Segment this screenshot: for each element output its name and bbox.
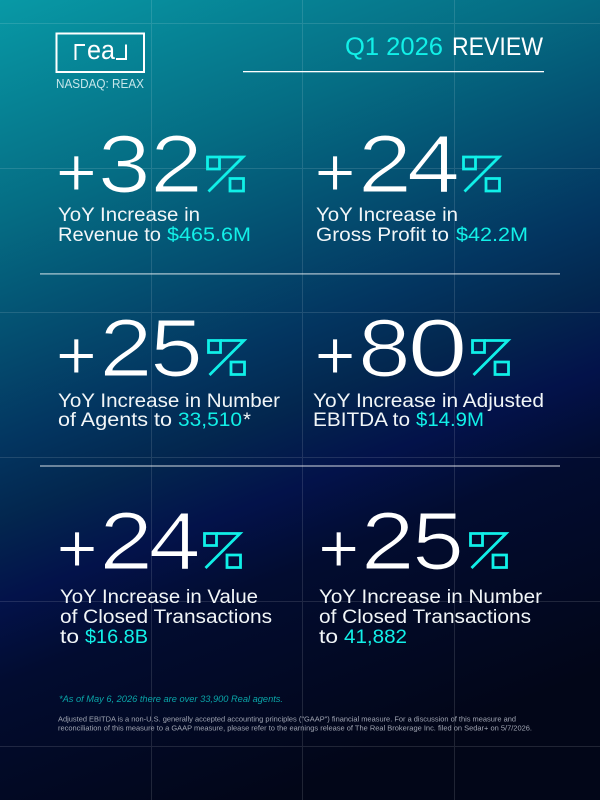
- panel: value of closed transactions: of Closed Transactions: [60, 607, 272, 628]
- panel: gross profit: Gross Profit to: [316, 225, 449, 246]
- panel: agents: [56, 303, 281, 431]
- panel: number of closed transactions: of Closed Transactions: [319, 607, 531, 628]
- footnote: adjusted EBITDA disclaimer: [58, 714, 532, 732]
- panel: revenue: [56, 119, 251, 246]
- footnote: adjusted EBITDA disclaimer: Adjusted EBITDA is a non-U.S. generally accepted accounting principles ("GAAP") financial measure. For a discussion of this measure and: [58, 714, 516, 724]
- icon: percent: [472, 340, 508, 375]
- panel: value of closed transactions: +: [57, 509, 98, 587]
- panel: number of closed transactions: 5: [412, 496, 464, 587]
- panel: number of closed transactions: to: [319, 627, 338, 648]
- panel: value of closed transactions: $16.8B: [85, 627, 148, 648]
- panel: gross profit: [315, 119, 528, 246]
- panel: agents: of Agents to: [58, 410, 172, 431]
- panel: adjusted EBITDA: [313, 303, 544, 431]
- footnote: adjusted EBITDA disclaimer: reconciliation of this measure to a GAAP measure, please refer to the earnings release of The Real Brokerage Inc. filed on Sedar+ on 5/7/2026.: [58, 724, 532, 732]
- panel: gross profit: 4: [407, 119, 460, 210]
- panel: value of closed transactions: 4: [148, 496, 201, 587]
- panel: adjusted EBITDA: +: [315, 316, 356, 394]
- panel: gross profit: YoY Increase in: [316, 205, 458, 226]
- panel: revenue: 2: [150, 119, 203, 210]
- panel: adjusted EBITDA: 0: [408, 303, 468, 394]
- panel: agents: YoY Increase in Number: [58, 391, 281, 412]
- panel: value of closed transactions: [57, 496, 272, 648]
- panel: number of closed transactions: YoY Increase in Number: [319, 587, 543, 608]
- panel: number of closed transactions: 2: [361, 496, 415, 587]
- panel: number of closed transactions: +: [318, 509, 359, 587]
- panel: gross profit: $42.2M: [456, 225, 528, 246]
- panel: value of closed transactions: to: [60, 627, 79, 648]
- icon: percent: [464, 157, 500, 192]
- icon: percent: [208, 340, 244, 375]
- panel: adjusted EBITDA: 8: [358, 303, 411, 394]
- panel: revenue: Revenue to: [58, 225, 161, 246]
- panel: agents: *: [243, 410, 252, 431]
- panel: adjusted EBITDA: $14.9M: [416, 410, 484, 431]
- panel: agents: 33,510: [178, 410, 242, 431]
- panel: revenue: +: [56, 133, 97, 211]
- icon: percent: [204, 534, 240, 568]
- icon: percent: [470, 534, 506, 568]
- panel: agents: 5: [150, 303, 203, 394]
- panel: adjusted EBITDA: EBITDA to: [313, 410, 410, 431]
- title: Q1 2026 Review: Q1 2026: [345, 33, 443, 61]
- panel: agents: +: [56, 316, 97, 394]
- panel: value of closed transactions: 2: [99, 496, 153, 587]
- logo: Real with NASDAQ ticker: [56, 34, 145, 91]
- icon: percent: [208, 157, 244, 192]
- panel: gross profit: +: [315, 133, 356, 211]
- panel: revenue: $465.6M: [167, 225, 251, 246]
- panel: revenue: 3: [98, 119, 151, 210]
- panel: number of closed transactions: 41,882: [344, 627, 407, 648]
- logo: Real with NASDAQ ticker: NASDAQ: REAX: [56, 77, 145, 91]
- panel: number of closed transactions: [318, 496, 543, 648]
- footnote: agents: *As of May 6, 2026 there are over 33,900 Real agents.: [59, 694, 283, 704]
- panel: agents: 2: [99, 303, 153, 394]
- panel: value of closed transactions: YoY Increase in Value: [60, 587, 258, 608]
- title: Q1 2026 Review: REVIEW: [452, 33, 543, 61]
- panel: revenue: YoY Increase in: [58, 205, 200, 226]
- title: Q1 2026 Review: [243, 33, 544, 72]
- panel: gross profit: 2: [358, 119, 412, 210]
- panel: adjusted EBITDA: YoY Increase in Adjusted: [313, 391, 544, 412]
- logo: Real with NASDAQ ticker: ea: [87, 35, 116, 65]
